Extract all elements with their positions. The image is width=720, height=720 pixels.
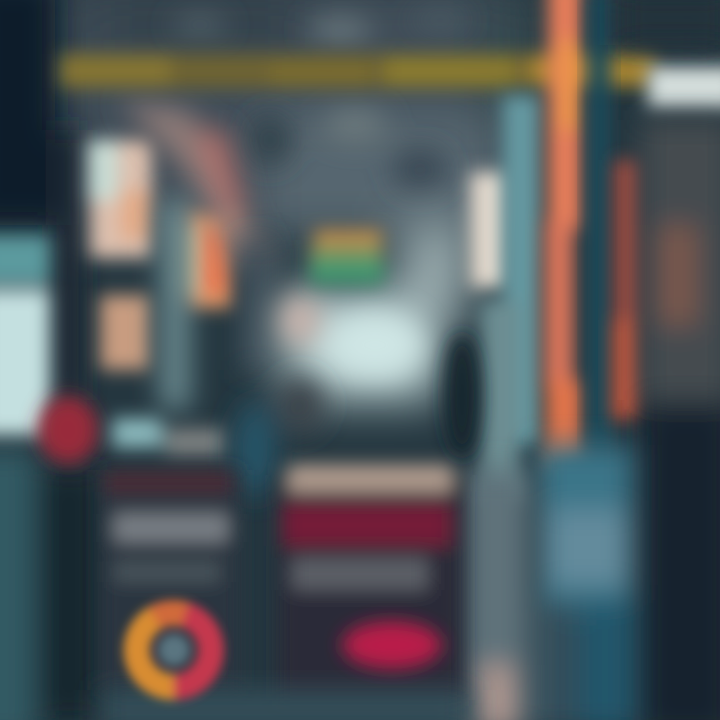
glowing orange panel — [180, 212, 234, 308]
diagonal pink beam — [120, 100, 270, 270]
blue figure — [235, 377, 324, 498]
red round figure — [38, 396, 98, 464]
floor — [462, 470, 530, 720]
dark teal column — [588, 0, 610, 450]
dark standing figure — [444, 333, 480, 457]
counter highlights — [112, 418, 225, 456]
left bright window — [0, 235, 50, 435]
orange vertical stripe — [544, 0, 582, 465]
donut chart — [137, 613, 211, 687]
pillars — [160, 200, 275, 410]
lower blue block — [525, 445, 636, 720]
central bright hall — [285, 220, 470, 400]
red semicircle — [342, 621, 442, 669]
ceiling spots — [172, 10, 468, 192]
bright column — [470, 172, 510, 288]
yellow banner — [60, 54, 655, 88]
red vertical stripe — [612, 160, 640, 420]
left dark column — [0, 0, 100, 720]
rainbow flag — [310, 230, 384, 284]
right desk — [278, 464, 463, 700]
left desk — [100, 470, 240, 690]
teal column — [480, 95, 540, 500]
bottom band — [100, 690, 470, 720]
ceiling — [60, 0, 720, 240]
far right wall — [620, 0, 720, 720]
top right white light — [648, 66, 720, 108]
window panels — [88, 140, 152, 370]
